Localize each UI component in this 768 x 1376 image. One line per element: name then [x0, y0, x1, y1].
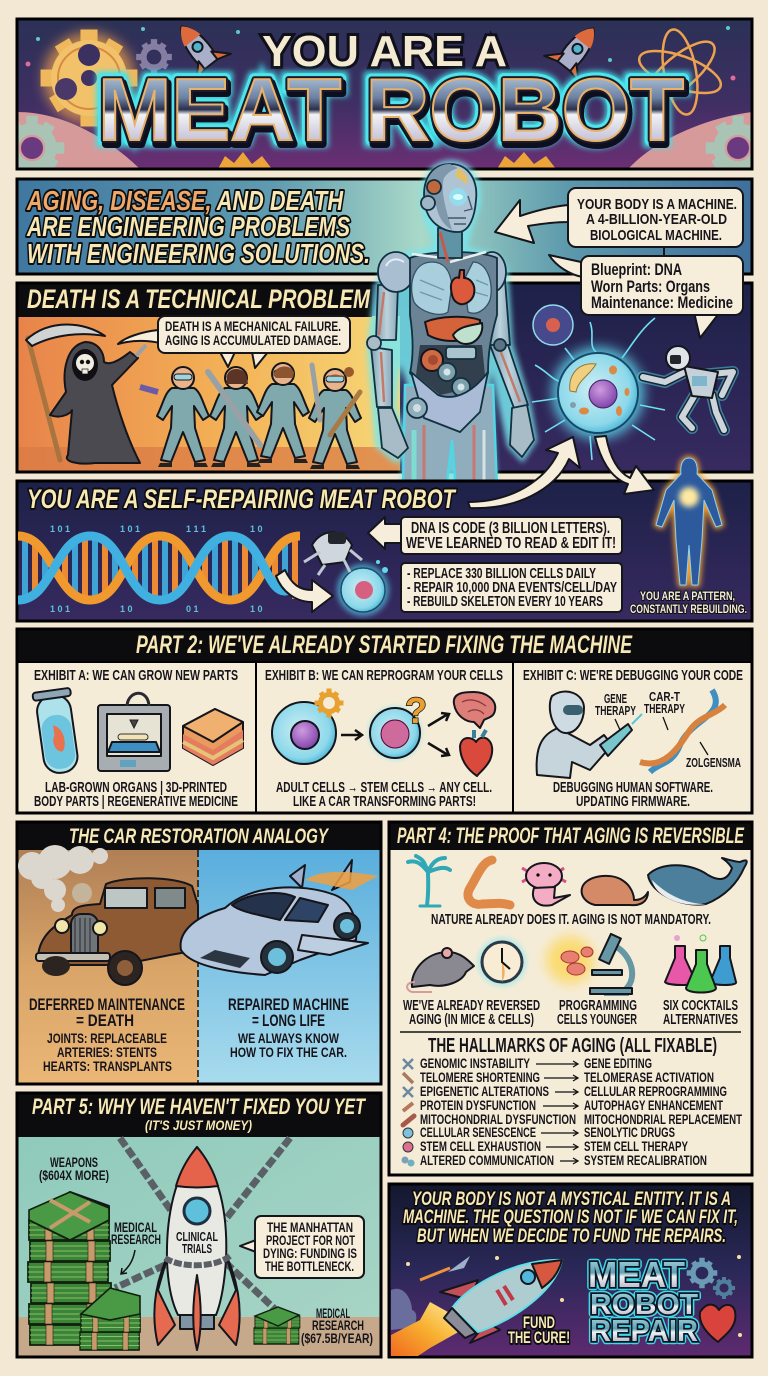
callout: blueprint list: Maintenance: Medicine: [591, 294, 733, 312]
panel: part 5 funding: [17, 1093, 381, 1357]
left arm: [376, 285, 398, 340]
panel: intro statement: [17, 179, 752, 274]
hallmarks icons: [402, 1059, 414, 1166]
text: repaired machine: = LONG LIFE: [252, 1011, 325, 1030]
icon: glowing cells: [546, 936, 594, 984]
captions: [403, 998, 738, 1028]
label: medical research amount: ($67.5B/YEAR): [301, 1331, 373, 1346]
chart: DNA helix: 1 0 1: [120, 524, 140, 534]
icon: gears: [687, 1258, 735, 1299]
decorative cloud: [391, 1289, 416, 1330]
label: gene therapy: THERAPY: [595, 704, 636, 718]
chart: DNA helix: 1 0: [250, 604, 263, 614]
chains: [115, 1138, 290, 1312]
callout: Manhattan project: THE MANHATTAN: [267, 1220, 353, 1235]
captions: CELLS YOUNGER: [557, 1012, 637, 1028]
logo: meat robot repair: ROBOT: [590, 1289, 698, 1321]
intro headline: ARE ENGINEERING PROBLEMS: [26, 211, 350, 242]
exhibit A: EXHIBIT A: WE CAN GROW NEW PARTS: [34, 667, 238, 684]
heading: YOU ARE A SELF-REPAIRING MEAT ROBOT: [27, 484, 457, 514]
lungs: [412, 262, 452, 314]
icon: repair cell: [337, 560, 389, 616]
orange rungs: [32, 537, 298, 599]
icon: axolotl: [522, 863, 570, 906]
callout: DNA is code with arrow: [368, 517, 622, 554]
exhibit B: EXHIBIT B: WE CAN REPROGRAM YOUR CELLS: [265, 667, 503, 684]
illustration: four engineers with wrenches: [140, 363, 361, 469]
title line 2: chrome lettering: MEAT ROBOT: [100, 64, 686, 163]
illustration: central transparent robot: [367, 163, 534, 490]
text: repaired machine: WE ALWAYS KNOW: [238, 1030, 340, 1046]
illustration: rocket: [440, 1260, 562, 1343]
icon: flatworm: [468, 860, 510, 905]
hallmarks list: ALTERED COMMUNICATION: [420, 1153, 554, 1168]
chart: DNA helix: 1 0 1: [50, 604, 70, 614]
intro headline: [26, 185, 370, 269]
shoulder pads: [378, 252, 414, 292]
legs: [403, 385, 497, 490]
icon: clock: [478, 938, 526, 986]
neck: [438, 228, 462, 258]
icon: heart: [700, 1305, 735, 1342]
illustration: medical research money stack: [80, 1288, 140, 1350]
label: clinical trials: CLINICAL: [176, 1229, 218, 1244]
illustration: rusty car: [36, 878, 198, 985]
label: Zolgensma: ZOLGENSMA: [686, 756, 741, 770]
caption: you are a pattern: YOU ARE A PATTERN,: [640, 589, 735, 603]
hallmarks list: STEM CELL THERAPY: [584, 1139, 688, 1154]
chart: DNA helix: 1 1 1: [186, 524, 206, 534]
title line 2: chrome lettering: MEAT ROBOT: [98, 60, 684, 159]
callout: repair stats: - REPLACE 330 BILLION CELLS DAILY: [407, 566, 596, 582]
torso: [410, 252, 497, 432]
illustration: smoke: [18, 845, 108, 912]
label: fund the cure: [508, 1313, 570, 1347]
callout: repair stats: - REPAIR 10,000 DNA EVENTS/CELL/DAY: [407, 580, 617, 596]
illustration: weapons money stack: [28, 1192, 111, 1345]
label: CAR-T therapy: CAR-T: [649, 690, 680, 704]
hallmarks list: GENE EDITING: [584, 1056, 652, 1071]
illustration: rocket chained: [154, 1147, 240, 1350]
callout: mechanical failure: AGING IS ACCUMULATED DAMAGE.: [165, 332, 341, 348]
chart: DNA helix: 0 1: [186, 604, 199, 614]
small cell: [533, 305, 573, 345]
hallmarks list: STEM CELL EXHAUSTION: [420, 1139, 541, 1154]
panel: closing call to action: [389, 1184, 752, 1357]
text: repaired machine: [228, 995, 349, 1060]
logo: meat robot repair: MEAT: [588, 1254, 685, 1295]
arrow: bubble to robot: [495, 200, 568, 243]
logo: meat robot repair: REPAIR: [590, 1313, 698, 1348]
label: medical research arrow: MEDICAL: [114, 1220, 157, 1235]
icon: gear: [315, 689, 343, 717]
icon: rocket right: [543, 27, 595, 78]
captions: WE'VE ALREADY REVERSED: [403, 998, 540, 1014]
hallmarks list: EPIGENETIC ALTERATIONS: [420, 1084, 549, 1099]
hallmarks list: TELOMERE SHORTENING: [420, 1070, 540, 1085]
text: repaired machine: HOW TO FIX THE CAR.: [230, 1044, 347, 1060]
hallmarks arrows: [536, 1061, 578, 1164]
abdominal organs: [425, 317, 480, 341]
illustration: small money stack: [254, 1307, 300, 1344]
chart: DNA helix: [18, 524, 300, 614]
illustration: rocket chained: TRIALS: [182, 1241, 212, 1256]
illustration: futuristic car: [181, 860, 378, 975]
icon: rocket left: [180, 25, 232, 74]
illustration: glowing human pattern: [656, 458, 722, 585]
logo: meat robot repair: ROBOT: [590, 1289, 698, 1321]
exhibit B: LIKE A CAR TRANSFORMING PARTS!: [293, 793, 476, 810]
exhibit B: [265, 667, 503, 810]
icon: hydra: [408, 856, 450, 906]
callout: Manhattan project: [240, 1216, 364, 1278]
callout: Manhattan project: DYING: FUNDING IS: [263, 1246, 357, 1261]
right arm: [490, 280, 510, 345]
icon: test tube: [32, 688, 82, 775]
callout: blueprint list: Worn Parts: Organs: [591, 278, 710, 296]
title line 1: YOU ARE A: [262, 27, 507, 76]
title line 2: chrome lettering: MEAT ROBOT: [98, 60, 684, 159]
icon: small gear: [136, 39, 172, 75]
label: fund the cure: FUND: [523, 1313, 555, 1332]
callout: blueprint list: [549, 247, 743, 338]
text: deferred maintenance: = DEATH: [76, 1011, 134, 1030]
arrow: cell to pattern: [595, 436, 654, 494]
title line 2: chrome lettering: MEAT ROBOT: [98, 60, 684, 159]
callout: repair stats: - REBUILD SKELETON EVERY 10 YEARS: [407, 594, 603, 610]
label: gene therapy: [595, 692, 636, 730]
intro headline: AGING, DISEASE, AND DEATH: [26, 185, 344, 216]
logo: meat robot repair: [588, 1254, 735, 1348]
illustration: flames: [391, 1302, 462, 1356]
callout: your body is a machine: A 4-BILLION-YEAR-OLD: [586, 211, 727, 228]
heart: [451, 270, 474, 304]
icon: whale: [648, 858, 747, 905]
panel: part 2 exhibits: [17, 629, 752, 813]
intro headline: WITH ENGINEERING SOLUTIONS.: [27, 238, 370, 269]
callout: Manhattan project: PROJECT FOR NOT: [266, 1233, 356, 1248]
text: deferred maintenance: HEARTS: TRANSPLANTS: [43, 1058, 172, 1074]
hands: [378, 408, 408, 458]
label: gene therapy: GENE: [604, 692, 627, 706]
head: [424, 164, 476, 232]
arrow: heading to cell: [468, 437, 580, 508]
collar: [412, 252, 486, 262]
label: medical research amount: RESEARCH: [312, 1318, 364, 1333]
illustration: grim reaper: [26, 324, 146, 464]
banner: title: [16, 18, 754, 170]
illustration: large cell with nanobot: [532, 305, 733, 460]
icon: adult cell: [272, 702, 336, 764]
captions: PROGRAMMING: [559, 998, 637, 1014]
icon: stem cell: [369, 707, 421, 759]
chart: DNA helix: 1 0: [120, 604, 133, 614]
arrow: DNA to cell: [276, 570, 333, 612]
icon: distant rocket: [420, 1256, 470, 1280]
hallmarks list: SENOLYTIC DRUGS: [584, 1125, 675, 1140]
icon: microscope: [590, 934, 632, 994]
icon: 3D printer: [98, 693, 170, 771]
icon: debugging robot: [537, 692, 642, 778]
panel: car restoration analogy: [17, 822, 381, 1084]
callout: mechanical failure: DEATH IS A MECHANICAL FAILURE.: [165, 318, 341, 334]
glow: [552, 347, 644, 439]
panel: death is a technical problem: [17, 283, 752, 472]
decorative sparks under title: [218, 152, 556, 169]
exhibit A: [32, 667, 243, 810]
label: medical research amount: MEDICAL: [316, 1306, 350, 1321]
panel: part 4 proof: [389, 822, 752, 1175]
callout: mechanical failure: [118, 316, 350, 368]
decorative planets with gears: [18, 112, 750, 168]
hallmarks list: GENOMIC INSTABILITY: [420, 1056, 530, 1071]
label: CAR-T therapy: THERAPY: [644, 702, 685, 716]
icon: mouse: [407, 948, 474, 992]
logo: meat robot repair: MEAT: [588, 1254, 685, 1295]
exhibit A: LAB-GROWN ORGANS | 3D-PRINTED: [45, 779, 227, 796]
hallmarks list: MITOCHONDRIAL DYSFUNCTION: [420, 1112, 576, 1127]
hallmarks list: SYSTEM RECALIBRATION: [584, 1153, 707, 1168]
pelvis: [411, 372, 488, 432]
captions: AGING (IN MICE & CELLS): [409, 1012, 534, 1028]
subheading: (IT'S JUST MONEY): [145, 1117, 252, 1133]
logo: meat robot repair: REPAIR: [590, 1313, 698, 1348]
icon: atom: [638, 28, 722, 116]
heading: THE CAR RESTORATION ANALOGY: [69, 825, 329, 848]
callout: Manhattan project: THE BOTTLENECK.: [265, 1259, 354, 1274]
arrow: [341, 730, 362, 740]
hallmarks list: [420, 1056, 743, 1168]
text: repaired machine: REPAIRED MACHINE: [228, 995, 349, 1014]
callout: your body is a machine: [568, 188, 743, 247]
heading: DEATH IS A TECHNICAL PROBLEM: [27, 284, 370, 314]
panel: self-repairing meat robot: [17, 458, 752, 621]
label: medical research arrow: RESEARCH: [111, 1232, 161, 1247]
label: weapons: [39, 1155, 109, 1183]
icon: DNA strand: [640, 690, 725, 772]
icon: skin tissue: [183, 709, 243, 765]
statement: [403, 1189, 738, 1247]
nanobot: [643, 346, 733, 430]
abdomen cavity: [416, 345, 486, 395]
icon: naked mole rat: [582, 876, 648, 905]
text: deferred maintenance: JOINTS: REPLACEABLE: [47, 1030, 167, 1046]
exhibit B: ADULT CELLS → STEM CELLS → ANY CELL.: [276, 779, 492, 796]
title line 2: chrome lettering: MEAT ROBOT: [98, 60, 684, 159]
exhibit C: [523, 667, 743, 810]
callout: DNA is code with arrow: DNA IS CODE (3 BILLION LETTERS).: [411, 520, 610, 537]
icon: small robot: [304, 532, 362, 575]
callout: repair stats: [401, 563, 622, 612]
icon: brain: [454, 692, 495, 728]
text: deferred maintenance: DEFERRED MAINTENANCE: [29, 995, 185, 1014]
hallmarks list: CELLULAR SENESCENCE: [420, 1125, 536, 1140]
label: weapons: WEAPONS: [50, 1155, 98, 1170]
arrows to organs: [428, 713, 449, 756]
chart: DNA helix: 1 0 1: [50, 524, 70, 534]
text: deferred maintenance: [29, 995, 185, 1074]
heading: PART 5: WHY WE HAVEN'T FIXED YOU YET: [32, 1094, 366, 1119]
icon: question mark: ?: [405, 690, 427, 731]
hallmarks list: TELOMERASE ACTIVATION: [584, 1070, 714, 1085]
exhibit C: UPDATING FIRMWARE.: [576, 793, 690, 810]
label: CAR-T therapy: [644, 690, 685, 730]
big cell body: [558, 353, 638, 433]
callout: DNA is code with arrow: WE'VE LEARNED TO READ & EDIT IT!: [406, 535, 616, 552]
label: fund the cure: THE CURE!: [508, 1328, 570, 1347]
chart: DNA helix: 1 0: [250, 524, 263, 534]
callout: your body is a machine: BIOLOGICAL MACHINE.: [590, 227, 722, 244]
stars: [406, 1255, 742, 1337]
blue rungs: [22, 537, 288, 599]
icon: flasks: [665, 935, 736, 992]
caption: you are a pattern: [630, 589, 747, 616]
label: weapons: ($604X MORE): [39, 1168, 109, 1183]
exhibit A: BODY PARTS | REGENERATIVE MEDICINE: [34, 793, 238, 810]
label: Zolgensma: [686, 742, 741, 770]
callout: blueprint list: Blueprint: DNA: [591, 261, 682, 279]
icon: heart: [460, 730, 492, 776]
label: medical research arrow: [111, 1220, 161, 1274]
hallmarks list: PROTEIN DYSFUNCTION: [420, 1098, 536, 1113]
decorative stars: [26, 26, 736, 80]
icon: large gear left: [41, 30, 137, 126]
text: deferred maintenance: ARTERIES: STENTS: [57, 1044, 157, 1060]
label: medical research amount: [301, 1306, 373, 1346]
outer glow: [370, 163, 534, 485]
